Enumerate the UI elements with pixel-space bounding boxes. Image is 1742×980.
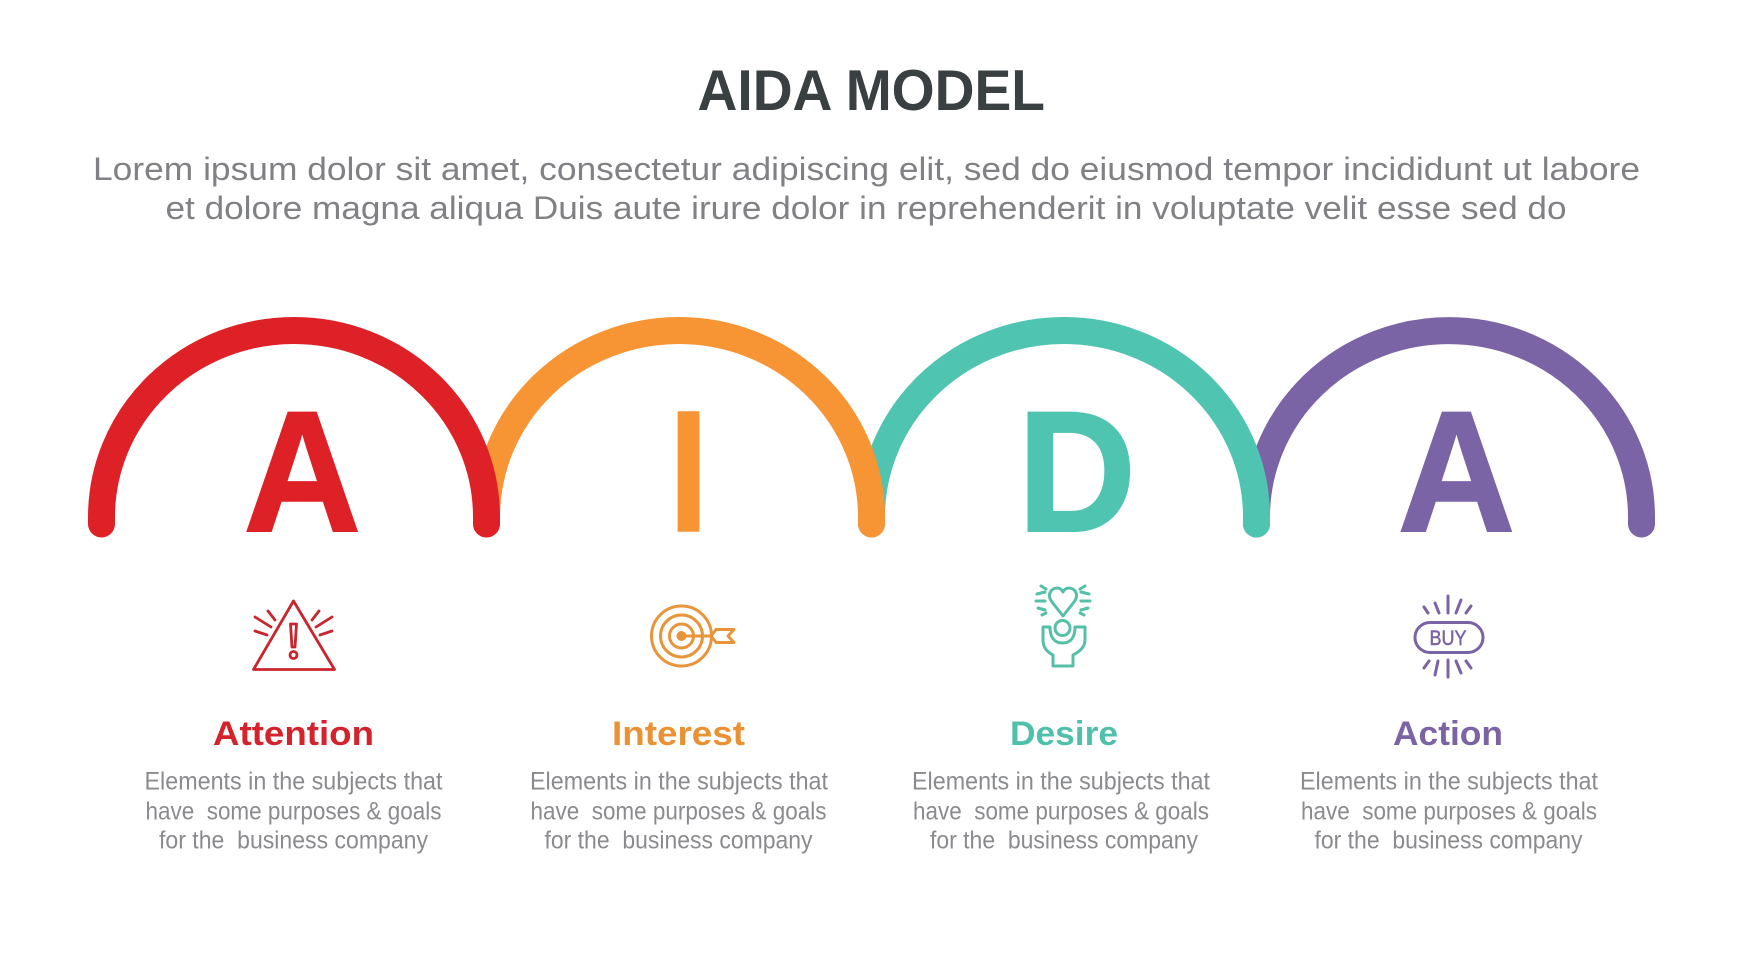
section: attention <box>144 715 443 854</box>
body text: interest: for the business company <box>544 826 813 854</box>
icon: target with arrow <box>652 606 734 666</box>
subtitle text <box>93 151 1640 226</box>
body text: action <box>1300 768 1598 854</box>
body text: desire <box>912 768 1210 854</box>
heading: interest: Interest <box>612 715 745 753</box>
body text: attention <box>144 768 443 854</box>
body text: action: for the business company <box>1314 826 1583 854</box>
body text: desire: for the business company <box>930 826 1198 854</box>
body text: desire: have some purposes & goals <box>913 798 1209 826</box>
section: desire <box>912 715 1210 854</box>
section: action <box>1300 715 1598 854</box>
title: AIDA MODEL <box>698 59 1045 123</box>
body text: attention: have some purposes & goals <box>146 798 442 826</box>
heading: attention: Attention <box>213 715 374 753</box>
icon: buy button: BUY <box>1430 627 1466 650</box>
body text: action: Elements in the subjects that <box>1300 768 1598 796</box>
subtitle text: et dolore magna aliqua Duis aute irure dolor in reprehenderit in voluptate velit esse sed do <box>166 190 1566 226</box>
body text: attention: for the business company <box>159 826 428 854</box>
arc: interest <box>486 331 872 524</box>
section: interest <box>530 715 828 854</box>
body text: attention: Elements in the subjects that <box>144 768 443 796</box>
body text: desire: Elements in the subjects that <box>912 768 1210 796</box>
body text: interest <box>530 768 828 854</box>
heading: action: Action <box>1393 715 1503 753</box>
icon: buy button <box>1415 596 1483 677</box>
arc: desire <box>872 331 1256 524</box>
arc: attention <box>102 331 486 524</box>
body text: interest: Elements in the subjects that <box>530 768 828 796</box>
letter D: D <box>1018 376 1136 568</box>
icon: hands raising heart <box>1036 586 1090 666</box>
heading: desire: Desire <box>1010 715 1118 753</box>
letter A: A <box>244 376 361 568</box>
body text: interest: have some purposes & goals <box>530 798 826 826</box>
subtitle text: Lorem ipsum dolor sit amet, consectetur adipiscing elit, sed do eiusmod tempor incididunt ut labore <box>93 151 1640 187</box>
letter I: I <box>668 375 710 570</box>
letter A: A <box>1398 376 1515 568</box>
icon: warning triangle <box>254 601 334 670</box>
arc: action <box>1256 331 1642 524</box>
body text: action: have some purposes & goals <box>1301 798 1597 826</box>
